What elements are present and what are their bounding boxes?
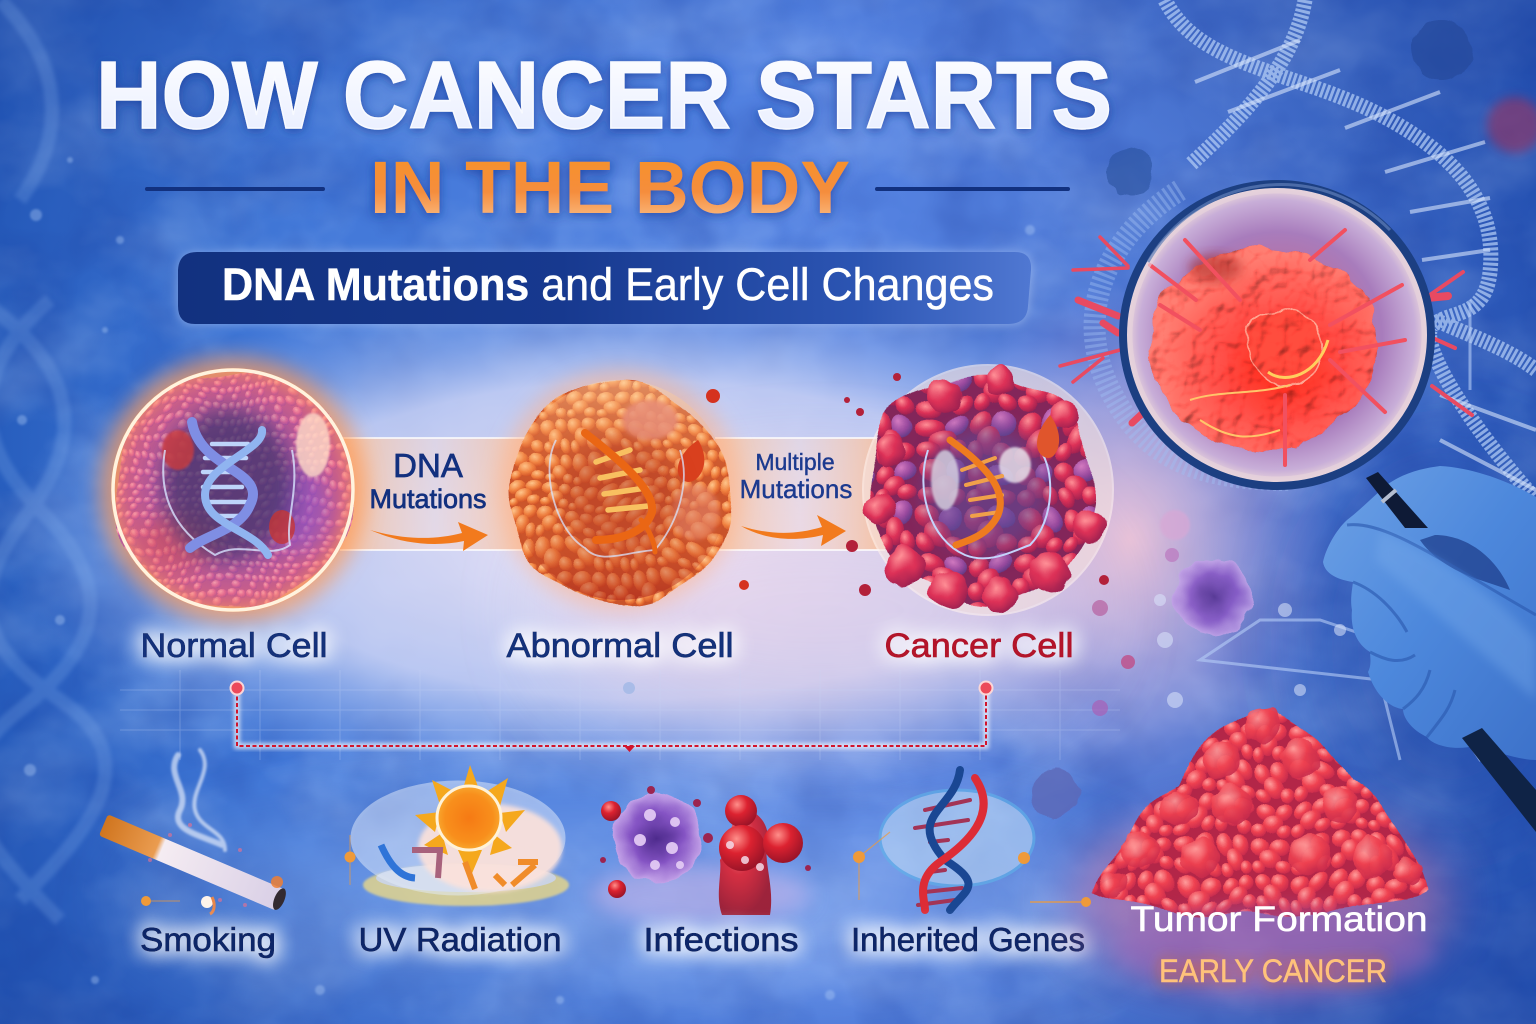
label: inherited genes: Inherited Genes [851, 921, 1085, 958]
arrow: normal to abnormal [370, 522, 488, 551]
tumor mass [1070, 707, 1450, 990]
connector bands [340, 438, 885, 550]
icon: DNA in normal cell [190, 422, 268, 555]
panel: cancer cell [844, 365, 1113, 615]
panel: normal cell [100, 357, 366, 623]
handle neck [1366, 472, 1428, 528]
spikes outside magnifier [1060, 237, 1472, 423]
label: normal cell: Normal Cell [140, 627, 328, 665]
magnifier [1123, 184, 1431, 486]
subtitle: in the body: IN THE BODY [370, 146, 850, 229]
text: DNA mutations [369, 447, 487, 514]
background DNA helix top right [1095, 0, 1536, 760]
icon: smoking [99, 750, 289, 914]
icon: UV radiation [344, 765, 569, 906]
label: tumor formation [1030, 897, 1435, 994]
tumor lobes [1099, 707, 1422, 898]
text: DNA mutations: Mutations [369, 484, 487, 514]
icon: gloved hand [1323, 466, 1536, 832]
label: cancer cell: Cancer Cell [884, 627, 1074, 665]
label: abnormal cell: Abnormal Cell [506, 627, 734, 665]
label: infections: Infections [644, 921, 798, 958]
bumps around cancer cell rim [864, 367, 1107, 614]
label: smoking: Smoking [140, 921, 276, 958]
small virus particles [1031, 510, 1346, 818]
label: tumor formation: Tumor Formation [1130, 900, 1428, 939]
text: multiple mutations [740, 449, 852, 504]
subtitle: in the body [145, 146, 1070, 229]
title line 1: HOW CANCER STARTS [96, 42, 1112, 149]
panel: abnormal cell [500, 370, 749, 610]
text: DNA mutations: DNA [393, 447, 463, 484]
text: multiple mutations: Mutations [740, 474, 852, 504]
lens content: cancer cell [1149, 230, 1405, 465]
label: UV radiation: UV Radiation [358, 921, 562, 958]
cell labels [140, 627, 1074, 665]
icon: DNA in abnormal cell [585, 433, 655, 552]
icon: infections [590, 786, 811, 925]
banner: DNA mutations [178, 252, 1031, 324]
connector: dotted line [230, 682, 992, 752]
icon: inherited genes [853, 770, 1034, 910]
handle [1462, 728, 1536, 832]
arrow: abnormal to cancer [741, 515, 846, 546]
label: tumor formation: EARLY CANCER [1159, 953, 1387, 989]
text: multiple mutations: Multiple [755, 449, 835, 475]
icon: DNA in cancer cell [950, 440, 1002, 545]
banner: DNA mutations: DNA Mutations and Early Cell Changes [222, 259, 994, 310]
